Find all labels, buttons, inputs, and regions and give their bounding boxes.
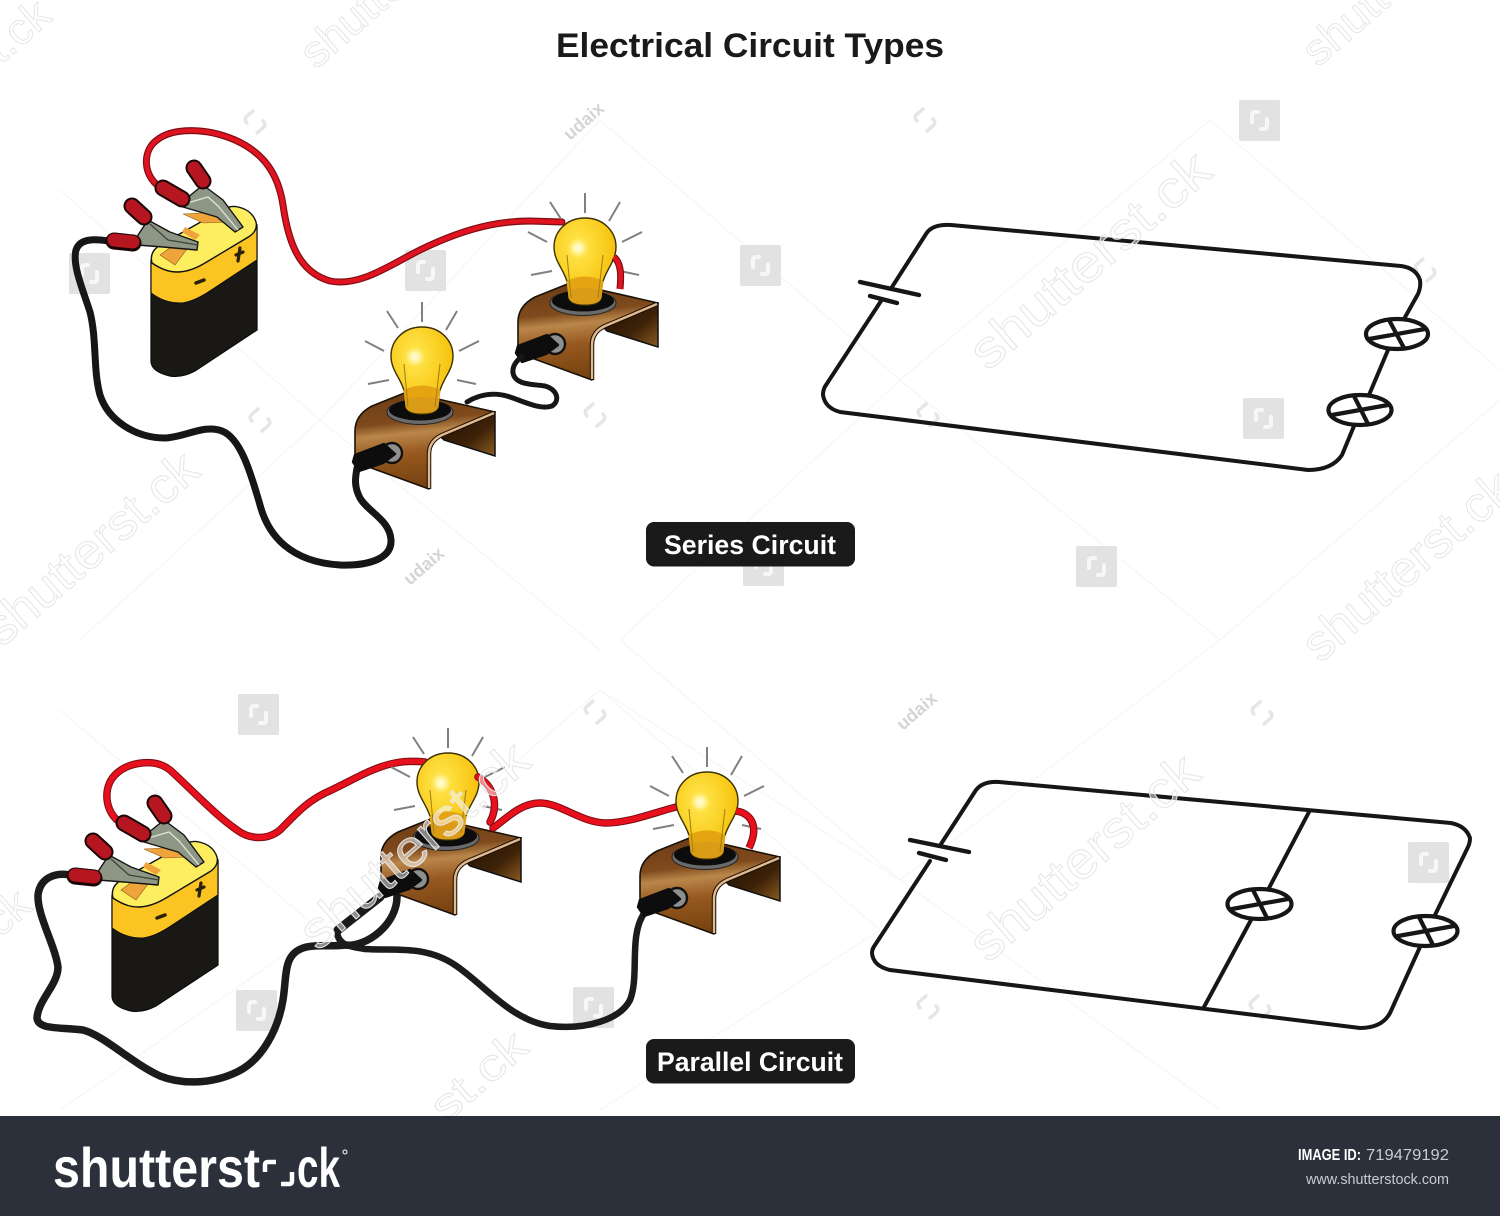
red wire loop behind second bulb xyxy=(736,811,754,848)
series circuit schematic xyxy=(823,225,1428,470)
schematic battery symbol xyxy=(860,282,919,303)
parallel circuit label xyxy=(646,1039,855,1084)
schematic lamp 1 xyxy=(1228,889,1292,919)
watermark text overlays: shutterst.ck xyxy=(288,730,542,961)
watermark tiles behind artwork xyxy=(69,100,1449,1031)
watermark text overlays: shutterst.ck xyxy=(958,742,1212,973)
red wire from battery to upper bulb xyxy=(146,131,562,282)
schematic battery symbol xyxy=(910,840,969,860)
schematic wires xyxy=(823,225,1420,470)
parallel circuit: physical wiring diagram xyxy=(37,728,780,1082)
watermark text overlays: shutterst.ck xyxy=(958,140,1223,381)
schematic lamp 2 xyxy=(1328,395,1392,425)
schematic wires xyxy=(872,782,1470,1028)
parallel circuit schematic xyxy=(872,782,1470,1028)
title: Electrical Circuit Types xyxy=(556,27,944,65)
bulb on wooden holder: upper xyxy=(516,193,658,380)
battery xyxy=(75,803,218,1011)
black wire between bulbs xyxy=(467,356,557,407)
bulb on wooden holder: lower xyxy=(353,302,495,489)
battery xyxy=(114,168,257,376)
series circuit label xyxy=(646,522,855,566)
footer logo: ck xyxy=(297,1136,341,1199)
red wire loop behind upper bulb xyxy=(614,257,621,289)
black wires to both bulbs xyxy=(37,874,645,1082)
first bulb on wooden holder xyxy=(379,728,521,915)
red wire loop behind first bulb xyxy=(478,777,494,822)
red wire from battery to first bulb xyxy=(107,761,425,838)
text: udaix xyxy=(560,98,608,144)
black wire from battery to lower bulb xyxy=(75,240,391,565)
series circuit label: Series Circuit xyxy=(664,530,836,560)
schematic lamp 1 xyxy=(1366,319,1428,349)
second bulb on wooden holder xyxy=(638,747,780,934)
footer bar xyxy=(0,1116,1500,1216)
footer logo: shutterst xyxy=(53,1136,260,1199)
text: udaix xyxy=(893,688,941,734)
text: udaix xyxy=(400,543,448,589)
watermark text overlays: st.ck xyxy=(420,1020,538,1132)
image id: 719479192 xyxy=(1366,1147,1449,1164)
series circuit: physical wiring diagram xyxy=(75,131,658,565)
image id: IMAGE ID: xyxy=(1298,1147,1361,1164)
website: www.shutterstock.com xyxy=(1305,1171,1449,1188)
parallel circuit label: Parallel Circuit xyxy=(657,1047,843,1077)
red wire between bulbs xyxy=(493,803,680,828)
schematic lamp 2 xyxy=(1394,916,1458,946)
